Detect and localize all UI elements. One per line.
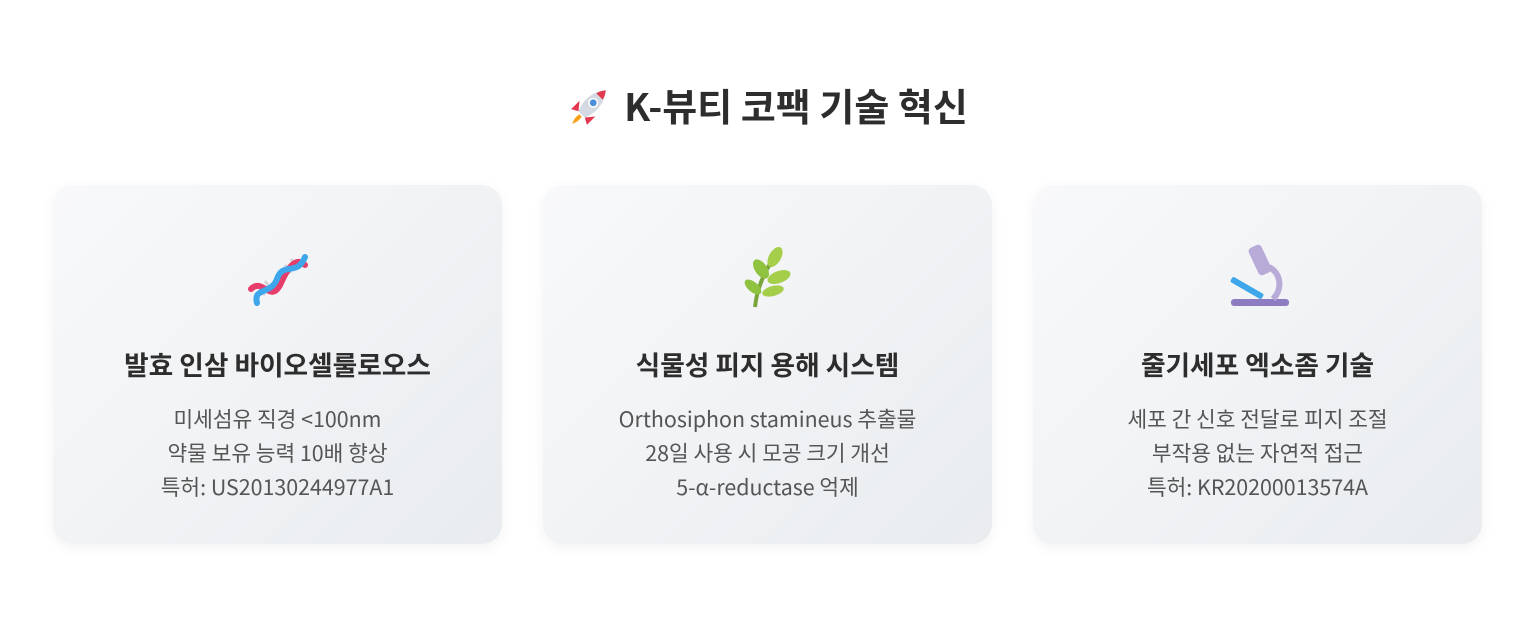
text block: 미세섬유 직경 <100nm xyxy=(173,403,382,434)
text block: 28일 사용 시 모공 크기 개선 xyxy=(645,437,890,468)
icon: herb xyxy=(744,247,790,308)
panel: bio cellulose xyxy=(53,185,502,544)
text block: 특허: KR20200013574A xyxy=(1147,471,1368,502)
heading: 줄기세포 엑소좀 기술 xyxy=(1141,344,1374,383)
text block: 5-α-reductase 억제 xyxy=(676,471,859,502)
heading: 식물성 피지 용해 시스템 xyxy=(636,344,899,383)
title: K-뷰티 코팩 기술 혁신 xyxy=(624,77,968,132)
text block: Orthosiphon stamineus 추출물 xyxy=(619,403,916,434)
text block: 특허: US20130244977A1 xyxy=(161,471,394,502)
text block: 약물 보유 능력 10배 향상 xyxy=(167,437,388,468)
icon: DNA xyxy=(248,254,308,306)
text block: 부작용 없는 자연적 접근 xyxy=(1152,437,1363,468)
heading: 발효 인삼 바이오셀룰로오스 xyxy=(124,344,431,383)
panel: plant sebum xyxy=(543,185,992,544)
text block xyxy=(161,403,394,502)
text block xyxy=(619,403,916,502)
text block xyxy=(1127,403,1388,502)
panel: exosome xyxy=(1033,185,1482,544)
text block: 세포 간 신호 전달로 피지 조절 xyxy=(1127,403,1388,434)
icon: microscope xyxy=(1230,244,1289,306)
